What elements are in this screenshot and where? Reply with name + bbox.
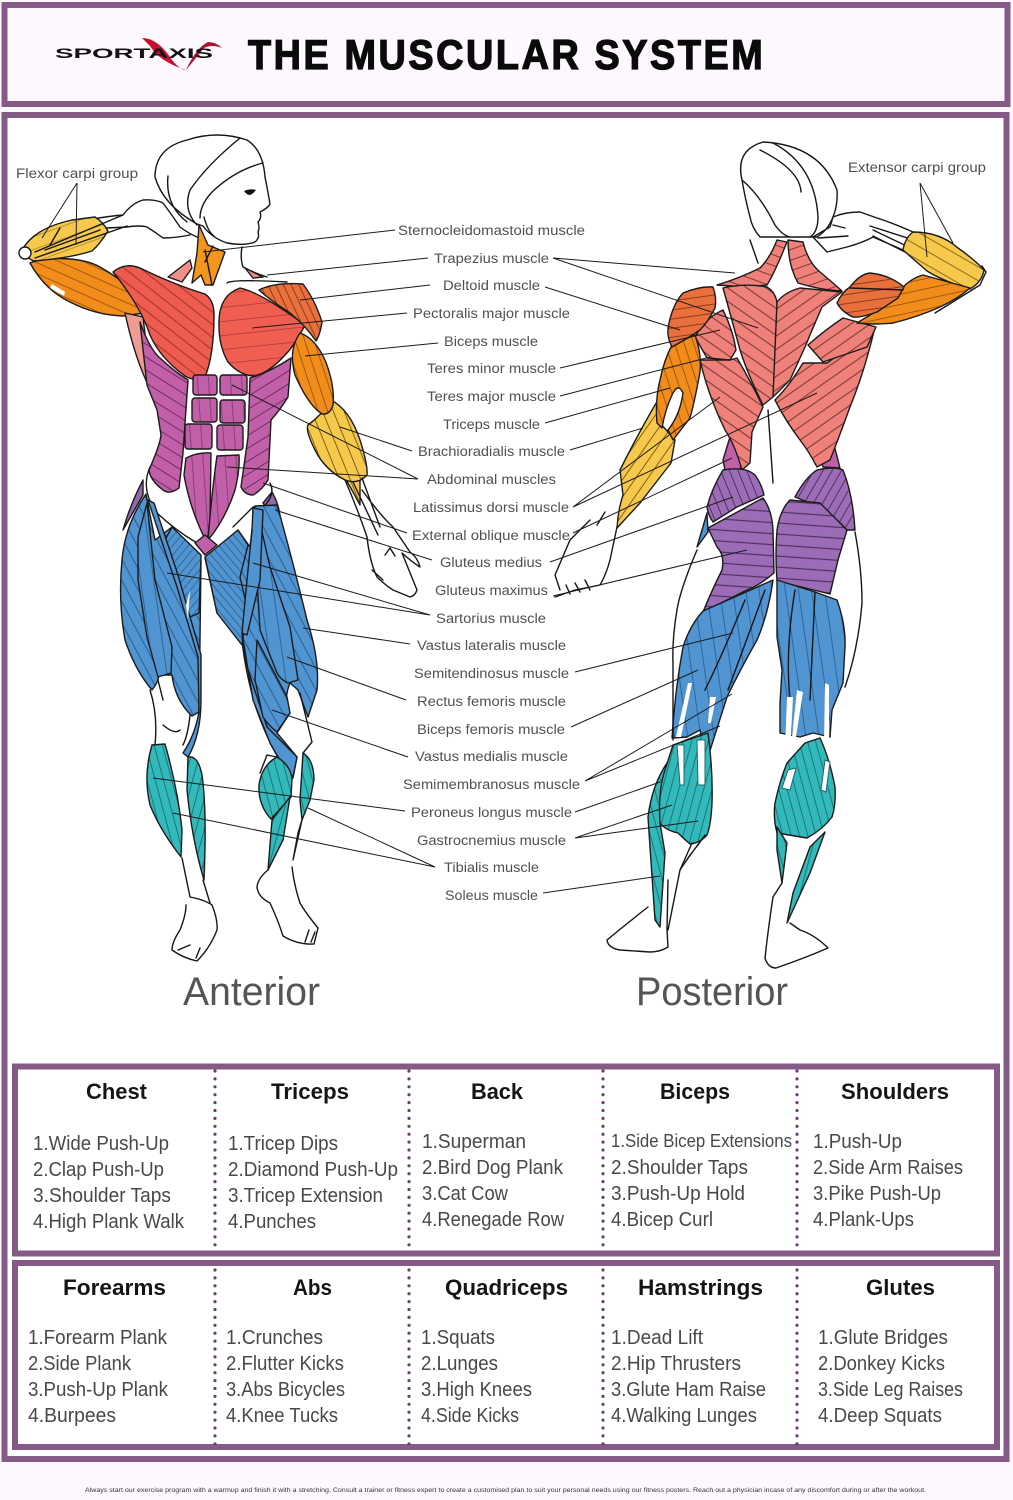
column: shoulders: 4.Plank-Ups [813, 1208, 914, 1231]
panel: exercise table row 2 [15, 1263, 997, 1447]
label: latissimus dorsi: Latissimus dorsi muscle [413, 500, 569, 515]
left arm, posterior [617, 287, 716, 528]
column: triceps [228, 1079, 398, 1233]
label: pectoralis major: Pectoralis major muscle [413, 306, 570, 321]
feet, posterior [607, 843, 828, 968]
column: back: Back [471, 1079, 524, 1104]
column: hamstrings: 3.Glute Ham Raise [611, 1378, 766, 1401]
column: abs: Abs [293, 1275, 332, 1300]
column: shoulders: Shoulders [841, 1079, 949, 1104]
left arm: triceps and forearm [19, 215, 144, 316]
label: trapezius: Trapezius muscle [434, 251, 549, 266]
footer disclaimer: Always start our exercise program with a warmup and finish it with a stretching. Consult a trainer or fitness expert to create a customised plan to suit your personal needs using our fitness posters. Reach out a physician incase of any discomfort during or after the workout. [85, 1488, 926, 1494]
column: hamstrings: 4.Walking Lunges [611, 1404, 757, 1427]
label: semimembranosus: Semimembranosus muscle [403, 777, 580, 792]
label: external oblique: External oblique muscle [412, 528, 570, 543]
label: extensor carpi group: Extensor carpi group [848, 160, 986, 175]
gluteus muscles [703, 468, 855, 612]
column: chest: Chest [86, 1079, 148, 1104]
column: biceps: 4.Bicep Curl [611, 1208, 713, 1231]
column: shoulders: 1.Push-Up [813, 1130, 902, 1153]
hamstrings [672, 513, 845, 760]
column: quadriceps: 2.Lunges [421, 1352, 498, 1375]
column: back: 3.Cat Cow [422, 1182, 508, 1205]
column: chest [33, 1079, 185, 1233]
leg outlines, posterior [673, 532, 862, 740]
column: shoulders: 3.Pike Push-Up [813, 1182, 941, 1205]
trapezius muscle [717, 240, 842, 483]
column: abs: 3.Abs Bicycles [226, 1378, 345, 1401]
caption: posterior: Posterior [636, 970, 788, 1014]
column: hamstrings: Hamstrings [638, 1275, 763, 1300]
column: glutes: 3.Side Leg Raises [818, 1378, 963, 1401]
column: hamstrings: 2.Hip Thrusters [611, 1352, 741, 1375]
column: abs: 1.Crunches [226, 1326, 323, 1349]
label: gastrocnemius: Gastrocnemius muscle [417, 833, 566, 848]
column: biceps: Biceps [660, 1079, 730, 1104]
label: brachioradialis: Brachioradialis muscle [418, 444, 565, 459]
column: quadriceps: 4.Side Kicks [421, 1404, 519, 1427]
column: triceps: 3.Tricep Extension [228, 1184, 383, 1207]
label: semitendinosus: Semitendinosus muscle [414, 666, 569, 681]
label: abdominal: Abdominal muscles [427, 472, 556, 487]
column: forearms: 4.Burpees [28, 1404, 116, 1427]
column: triceps: 2.Diamond Push-Up [228, 1158, 398, 1181]
label: deltoid: Deltoid muscle [443, 278, 540, 293]
head and hair [155, 135, 270, 244]
rectus abdominis [184, 375, 247, 543]
column: forearms: Forearms [63, 1275, 166, 1300]
column: hamstrings [611, 1275, 766, 1427]
muscle labels [16, 160, 986, 903]
column: forearms: 1.Forearm Plank [28, 1326, 168, 1349]
teres and latissimus dorsi muscles [695, 310, 876, 470]
label: flexor carpi group: Flexor carpi group [16, 166, 138, 181]
column: triceps: Triceps [271, 1079, 349, 1104]
column: chest: 4.High Plank Walk [33, 1210, 185, 1233]
column: glutes: 1.Glute Bridges [818, 1326, 948, 1349]
knee and leg outlines [150, 680, 312, 773]
column: glutes: 2.Donkey Kicks [818, 1352, 945, 1375]
column: back: 2.Bird Dog Plank [422, 1156, 564, 1179]
label: peroneus longus: Peroneus longus muscle [411, 805, 572, 820]
label: triceps: Triceps muscle [443, 417, 540, 432]
label: vastus lateralis: Vastus lateralis muscle [417, 638, 566, 653]
calf muscles [648, 733, 835, 927]
torso side muscles [125, 313, 291, 495]
thigh muscles, anterior right leg [205, 505, 318, 778]
label: biceps femoris: Biceps femoris muscle [417, 722, 565, 737]
column: biceps [611, 1079, 792, 1231]
logo: Sportaxis: SPORTAXIS [55, 45, 213, 61]
label: gluteus maximus: Gluteus maximus [435, 583, 548, 598]
lower legs, anterior [147, 744, 314, 880]
figure: anterior muscular body [19, 135, 420, 961]
pectoralis major muscles [113, 266, 305, 379]
column: chest: 1.Wide Push-Up [33, 1132, 169, 1155]
column: shoulders: 2.Side Arm Raises [813, 1156, 963, 1179]
panel: exercise table row 1 [15, 1066, 997, 1254]
column: abs: 2.Flutter Kicks [226, 1352, 344, 1375]
panel: header [4, 5, 1008, 104]
label: teres minor: Teres minor muscle [427, 361, 556, 376]
column: back [422, 1079, 564, 1231]
column: forearms: 2.Side Plank [28, 1352, 132, 1375]
column: abs [226, 1275, 345, 1427]
deltoid, biceps, forearm on lowered arm [259, 284, 367, 505]
label: biceps: Biceps muscle [444, 334, 538, 349]
column: biceps: 2.Shoulder Taps [611, 1156, 748, 1179]
column: forearms [28, 1275, 169, 1427]
label: soleus: Soleus muscle [445, 888, 538, 903]
feet, anterior [172, 858, 318, 961]
column: triceps: 4.Punches [228, 1210, 316, 1233]
column: biceps: 3.Push-Up Hold [611, 1182, 745, 1205]
column: quadriceps [421, 1275, 568, 1427]
column: abs: 4.Knee Tucks [226, 1404, 338, 1427]
column: forearms: 3.Push-Up Plank [28, 1378, 169, 1401]
neck and collar outline [227, 247, 287, 283]
column: hamstrings: 1.Dead Lift [611, 1326, 703, 1349]
label: vastus medialis: Vastus medialis muscle [415, 749, 568, 764]
label: sartorius: Sartorius muscle [436, 611, 546, 626]
neck muscles [168, 225, 263, 285]
right arm, posterior [837, 232, 986, 324]
caption: anterior: Anterior [183, 970, 320, 1014]
hand on lowered arm [345, 478, 420, 597]
column: back: 4.Renegade Row [422, 1208, 564, 1231]
column: back: 1.Superman [422, 1130, 526, 1153]
label: sternocleidomastoid: Sternocleidomastoid muscle [398, 223, 585, 238]
figure: posterior muscular body [555, 142, 986, 968]
column: quadriceps: 1.Squats [421, 1326, 495, 1349]
column: biceps: 1.Side Bicep Extensions [611, 1131, 792, 1151]
lower back obliques [723, 433, 840, 470]
thigh muscles, anterior left leg [121, 494, 201, 757]
column: glutes: Glutes [866, 1275, 935, 1300]
logo: Sportaxis [55, 38, 222, 70]
column: quadriceps: 3.High Knees [421, 1378, 532, 1401]
title: THE MUSCULAR SYSTEM [248, 32, 763, 78]
column: shoulders [813, 1079, 963, 1231]
column: chest: 2.Clap Push-Up [33, 1158, 164, 1181]
column: triceps: 1.Tricep Dips [228, 1132, 338, 1155]
head, posterior [741, 142, 837, 263]
pubic tendon [195, 535, 217, 555]
column: chest: 3.Shoulder Taps [33, 1184, 171, 1207]
label: rectus femoris: Rectus femoris muscle [417, 694, 566, 709]
leader lines [42, 183, 953, 893]
column: glutes: 4.Deep Squats [818, 1404, 942, 1427]
label: tibialis: Tibialis muscle [444, 860, 539, 875]
label: teres major: Teres major muscle [427, 389, 556, 404]
label: gluteus medius: Gluteus medius [440, 555, 542, 570]
raised arm hand, posterior [813, 212, 920, 252]
raised arm outline and hand [93, 200, 197, 238]
column: quadriceps: Quadriceps [445, 1275, 568, 1300]
left hand, posterior [555, 512, 617, 597]
hip outlines and gluteus medius [123, 467, 280, 543]
column: glutes [818, 1275, 963, 1427]
